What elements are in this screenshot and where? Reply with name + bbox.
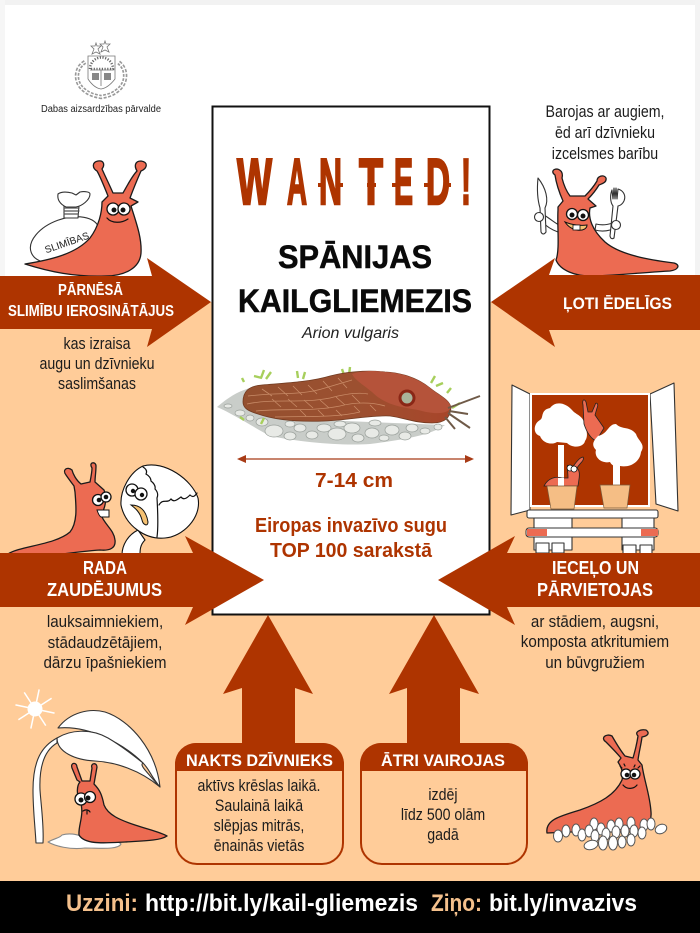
label: pārnēsā: PĀRNĒSĀ (58, 282, 123, 299)
footer text: more info (66, 890, 637, 917)
title: WANTED!: T (359, 146, 383, 218)
arrow: pārnēsā (0, 258, 211, 347)
icon: person (121, 465, 199, 555)
label: rada zaudējumus: ZAUDĒJUMUS (47, 580, 162, 600)
text: diseases: saslimšanas (58, 375, 136, 393)
title: WANTED!: N (319, 146, 342, 218)
label: ļoti ēdelīgs: ĻOTI ĒDELĪGS (563, 294, 672, 313)
title: WANTED!: E (394, 146, 413, 218)
arrow: rada zaudējumus (0, 536, 264, 625)
text: diseases (39, 335, 155, 393)
icon: puddle (48, 834, 121, 849)
title: WANTED!: D (426, 146, 450, 218)
illustration: slug with knife and fork (534, 169, 678, 276)
icon: slug (553, 169, 678, 276)
text: damages: dārzu īpašniekiem (43, 654, 167, 672)
illustration: slug on gravel (217, 367, 480, 445)
icon: sun (11, 685, 59, 733)
icon: slug (547, 730, 651, 833)
text: spreading: komposta atkritumiem (521, 633, 669, 651)
panel text: slēpjas mitrās, (214, 817, 304, 835)
text: top 100 list: Eiropas invazīvo sugu (255, 515, 447, 537)
panel text: gadā (427, 826, 459, 844)
arrow: up right (389, 615, 479, 745)
arrow: ļoti ēdelīgs (491, 258, 700, 347)
organization name: Dabas aizsardzības pārvalde (41, 104, 161, 115)
footer text: more info: Uzzini: (66, 890, 138, 917)
label: ieceļo un pārvietojas: PĀRVIETOJAS (537, 580, 653, 600)
icon: coat of arms (77, 41, 125, 97)
panel text: ēnainās vietās (214, 837, 305, 855)
size label: 7-14 cm (315, 470, 393, 492)
text: diet: izcelsmes barību (552, 145, 658, 163)
heading: species name: SPĀNIJAS (278, 239, 432, 275)
label: rada zaudējumus (47, 558, 162, 600)
footer text: more info: http://bit.ly/kail-gliemezis (145, 890, 418, 917)
text: top 100 list: TOP 100 sarakstā (270, 540, 433, 562)
icon: slug (25, 161, 146, 276)
footer bar (0, 881, 700, 933)
icon: tree with slug (535, 403, 587, 509)
panel: wanted poster: ! (461, 146, 471, 218)
illustration: slug with disease sack (24, 161, 146, 276)
text: diet (546, 103, 664, 163)
icon: sack labelled SLIMĪBAS: SLIMĪBAS (43, 230, 91, 256)
text: top 100 list (255, 515, 447, 562)
text: diseases: kas izraisa (64, 335, 131, 353)
logo: Dabas aizsardzības pārvalde (41, 41, 161, 115)
panel: nakts dzīvnieks (175, 743, 344, 864)
icon: arms and cutlery (534, 178, 625, 239)
title: WANTED! (237, 146, 471, 218)
footer text: more info: Ziņo: (431, 890, 482, 917)
latin name: Arion vulgaris (301, 325, 399, 342)
icon: tree with slug in back (583, 400, 643, 508)
text: damages: lauksaimniekiem, (47, 613, 163, 631)
text: spreading: un būvgružiem (545, 654, 645, 672)
title: WANTED!: W (237, 146, 272, 218)
panel: ātri vairojas (360, 743, 528, 864)
icon: eggs (554, 817, 668, 851)
icon: slug (7, 463, 115, 559)
icon: truck cargo (531, 394, 649, 506)
heading: species name: KAILGLIEMEZIS (238, 283, 472, 319)
text: spreading: ar stādiem, augsni, (531, 613, 659, 631)
text: diet: ēd arī dzīvnieku (555, 124, 655, 142)
label: ieceļo un pārvietojas (537, 558, 653, 600)
text: diet: Barojas ar augiem, (546, 103, 664, 121)
label: rada zaudējumus: RADA (83, 558, 127, 578)
icon: slug (72, 763, 167, 843)
panel text: līdz 500 olām (401, 806, 485, 824)
panel text: izdēj (428, 786, 458, 804)
text: damages (43, 613, 167, 672)
title: WANTED!: A (287, 146, 307, 218)
label: ieceļo un pārvietojas: IECEĻO UN (552, 558, 639, 578)
panel text (401, 786, 485, 844)
heading: species name (238, 239, 472, 319)
illustration: truck with plants (511, 383, 678, 554)
icon: truck doors (511, 383, 678, 515)
illustration: shocked farmer and slug (7, 463, 199, 559)
illustration: slug with eggs (547, 730, 668, 851)
panel heading: NAKTS DZĪVNIEKS (186, 751, 333, 770)
illustration: slug hiding under leaf (11, 685, 167, 849)
panel text: aktīvs krēslas laikā. (198, 777, 320, 795)
icon: leaf (33, 711, 160, 843)
label: pārnēsā (8, 282, 174, 320)
panel: wanted poster (212, 106, 490, 614)
icon: truck chassis (526, 510, 658, 554)
arrow: up left (223, 615, 313, 745)
panel text: Saulainā laikā (215, 797, 304, 815)
panel text (198, 777, 320, 855)
arrow: ieceļo un pārvietojas (438, 536, 700, 625)
panel heading: ĀTRI VAIROJAS (381, 751, 505, 770)
footer text: more info: bit.ly/invazivs (489, 890, 637, 917)
text: spreading (521, 613, 669, 672)
label: pārnēsā: SLIMĪBU IEROSINĀTĀJUS (8, 303, 174, 320)
text: damages: stādaudzētājiem, (48, 634, 162, 652)
arrow: size range (237, 455, 474, 463)
text: diseases: augu un dzīvnieku (39, 355, 155, 373)
